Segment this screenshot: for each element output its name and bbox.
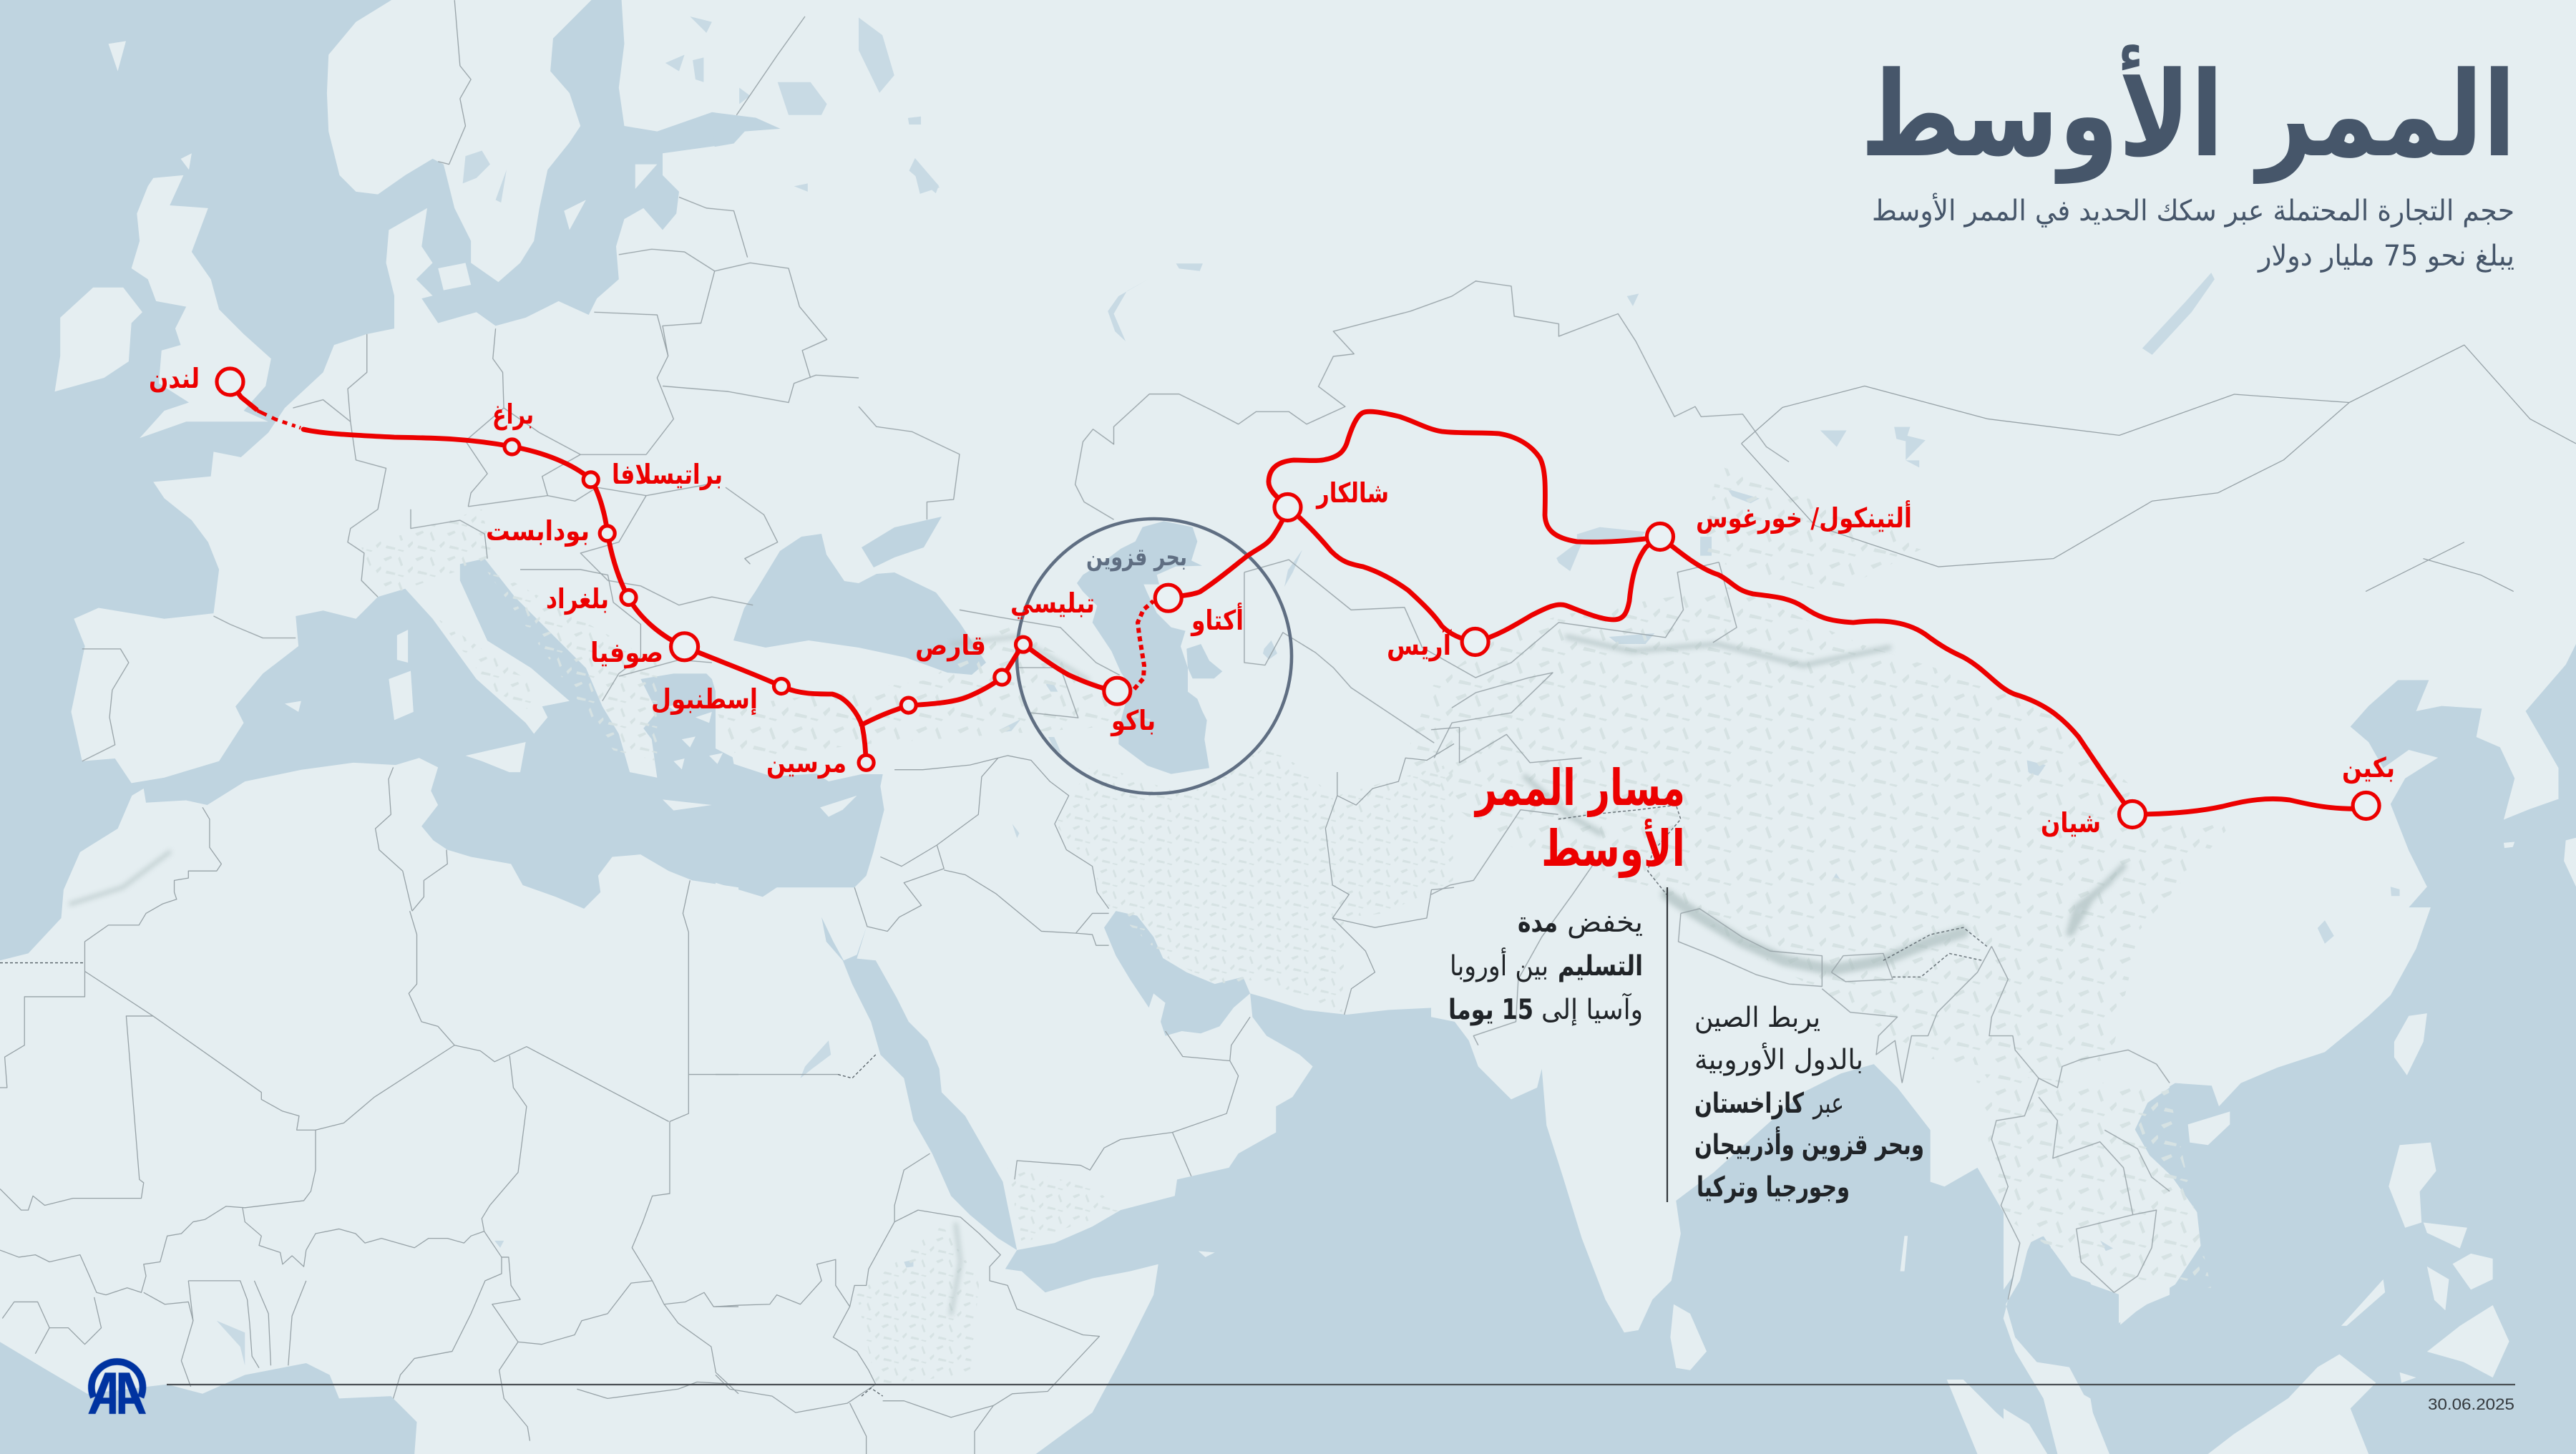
city labels: آريس [1387, 628, 1452, 661]
city labels [149, 363, 2395, 839]
subtitle [1872, 192, 2514, 273]
heading: route of the Middle Corridor [1474, 758, 1685, 878]
city labels: صوفيا [590, 637, 663, 668]
city labels: إسطنبول [651, 683, 758, 716]
text block: countries linked: كازاخستان [1694, 1088, 1804, 1120]
vertical divider [1667, 887, 1668, 1202]
text block: countries linked: وبحر قزوين وأذربيجان [1694, 1126, 1924, 1161]
text block: countries linked: يربط الصين [1694, 1002, 1820, 1034]
city labels: شيان [2041, 807, 2101, 839]
city labels: براغ [492, 399, 534, 430]
text block: countries linked [1694, 1002, 1924, 1204]
city labels: تبليسي [1010, 587, 1095, 619]
subtitle: حجم التجارة المحتملة عبر سكك الحديد في الممر الأوسط [1872, 192, 2514, 228]
text block: delivery time: وآسيا إلى [1541, 992, 1643, 1026]
map: inland seas and lakes [217, 16, 2400, 1365]
route stops [217, 369, 2379, 827]
city labels: براتيسلافا [612, 459, 723, 490]
text block: delivery time [1448, 907, 1643, 1026]
highlighted Caspian Sea circle [1017, 519, 1292, 794]
text block: delivery time: 15 يوما [1448, 994, 1533, 1026]
city labels: أكتاو [1190, 602, 1244, 637]
map: relief shading [361, 465, 2233, 1385]
label: Caspian Sea: بحر قزوين [1086, 543, 1187, 572]
city labels: بلغراد [546, 583, 609, 615]
city labels: ألتينكول/ خورغوس [1696, 500, 1912, 534]
map: mountain ridges [71, 637, 2124, 1314]
heading: route of the Middle Corridor: مسار الممر [1474, 758, 1685, 817]
city labels: مرسين [766, 747, 847, 779]
text block: countries linked: وجورجيا وتركيا [1697, 1171, 1850, 1204]
text block: countries linked: بالدول الأوروبية [1694, 1042, 1863, 1076]
text block: delivery time: مدة [1518, 907, 1558, 939]
city labels: شالكار [1315, 477, 1389, 509]
city labels: باكو [1110, 705, 1156, 736]
city labels: لندن [149, 363, 200, 394]
text block: delivery time: يخفض [1567, 907, 1643, 939]
city labels: بودابست [486, 515, 590, 547]
city labels: قارص [915, 630, 986, 661]
railway route line [230, 382, 2366, 814]
text block: countries linked: عبر [1812, 1088, 1844, 1120]
heading: route of the Middle Corridor: الأوسط [1541, 819, 1685, 878]
text block: delivery time: التسليم [1558, 950, 1643, 982]
text block: delivery time: بين أوروبا [1450, 947, 1548, 982]
subtitle: يبلغ نحو 75 مليار دولار [2257, 240, 2514, 273]
date: 30.06.2025 [2428, 1395, 2514, 1413]
icon: Anadolu Agency logo [88, 1362, 146, 1414]
city labels: بكين [2342, 752, 2395, 784]
footer rule [167, 1384, 2515, 1385]
